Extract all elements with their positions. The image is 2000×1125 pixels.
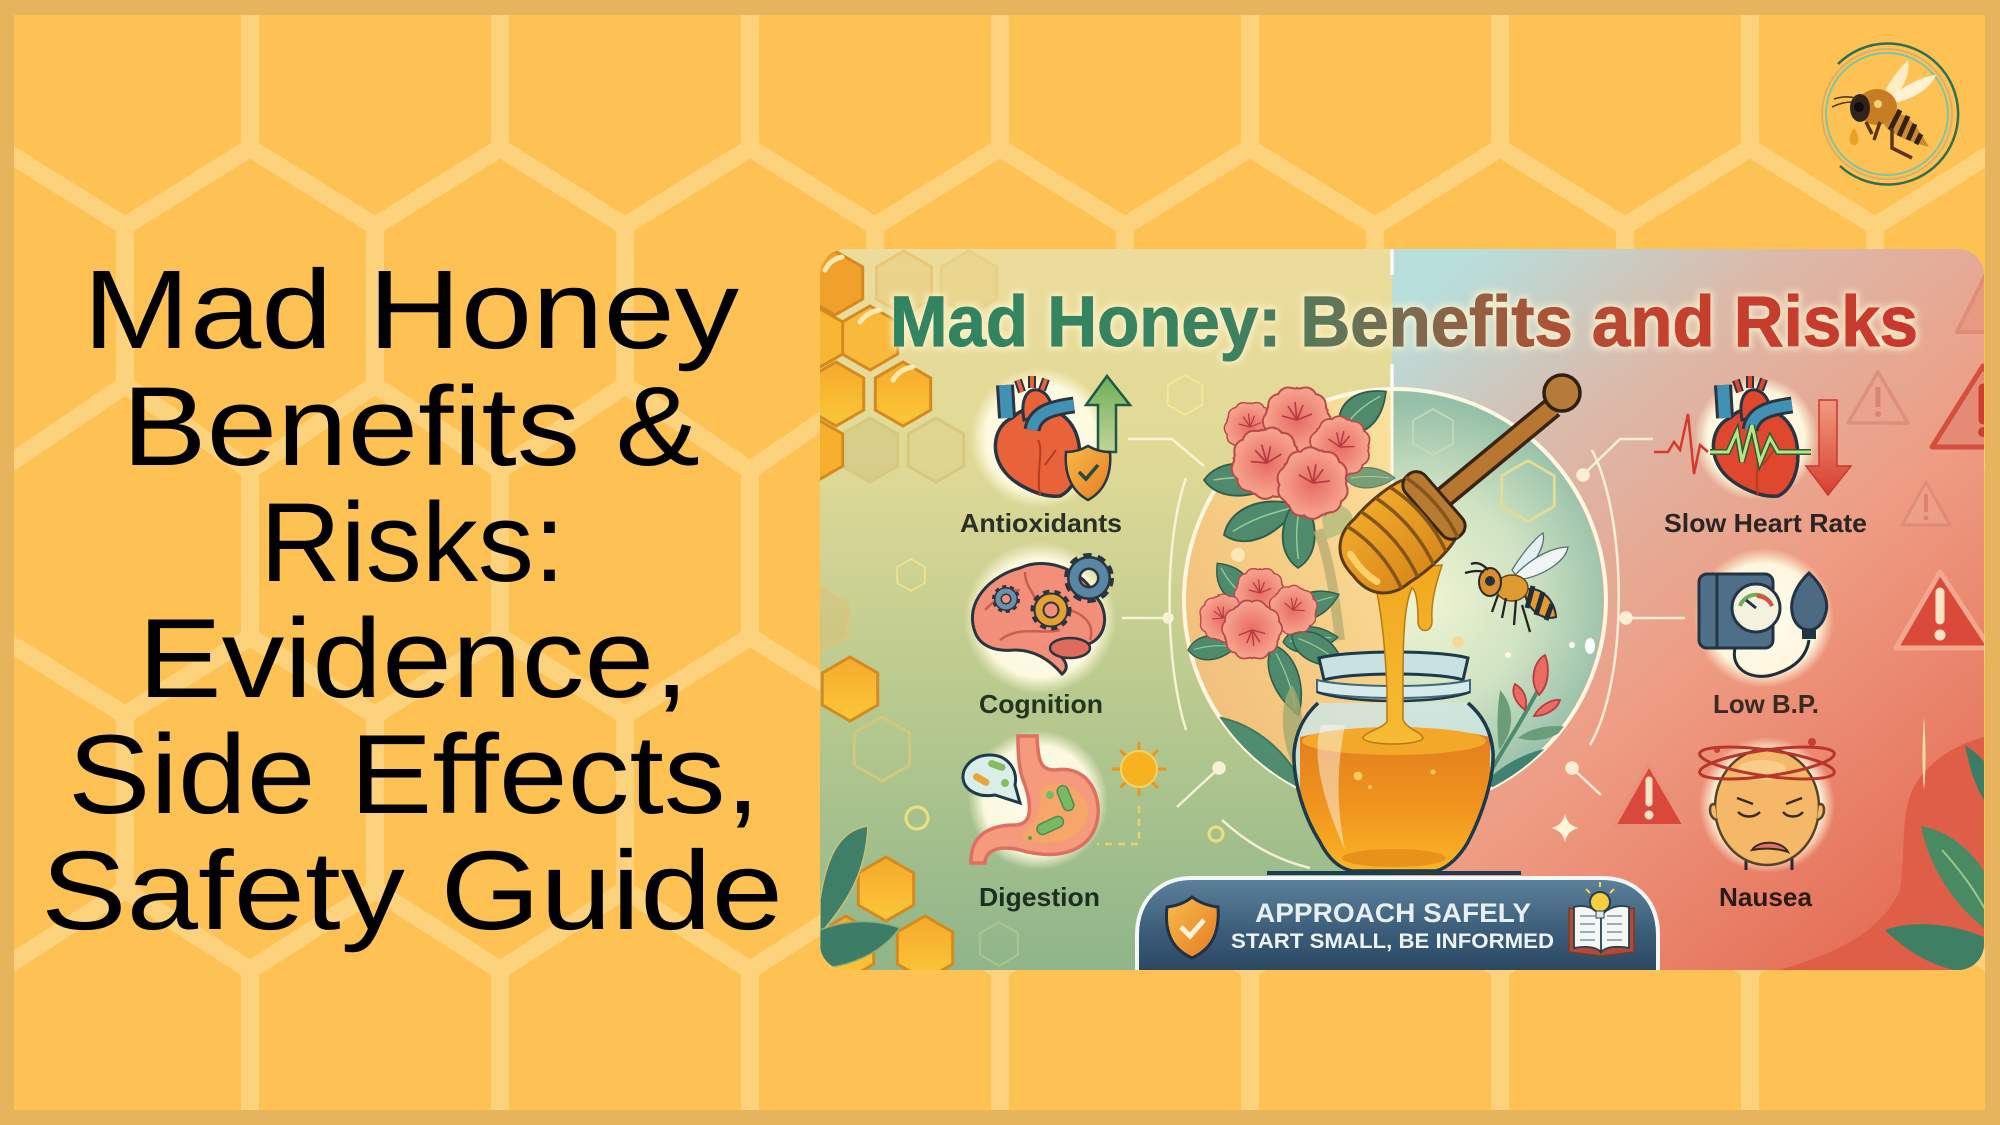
warning triangle, small faint — [1902, 482, 1950, 525]
icon: brain with gears — [964, 542, 1116, 694]
pink bud — [1513, 655, 1560, 716]
main title: Side Effects, — [68, 712, 760, 837]
flowers and leaves, top cluster — [1204, 378, 1397, 640]
icon: stomach with microbes and sun — [963, 730, 1165, 870]
panel background — [820, 249, 1984, 970]
main title — [41, 247, 783, 953]
label: slow heart rate: Slow Heart Rate — [1664, 508, 1867, 538]
icon: open book with light bulb — [1569, 882, 1634, 956]
icon: blood pressure monitor — [1694, 548, 1834, 688]
honeycomb and leaves, bottom left — [818, 826, 953, 980]
honeycomb cluster, top left — [820, 250, 998, 484]
main title: Safety Guide — [41, 828, 783, 953]
warning triangle, red — [1896, 572, 1990, 648]
warning triangle, faint — [1848, 372, 1908, 423]
label: digestion: Digestion — [979, 882, 1100, 912]
warning triangle, top right corner — [1955, 274, 1984, 334]
label: cognition: Cognition — [979, 689, 1103, 719]
decorative arcs and connector lines — [1122, 439, 1685, 868]
main title: Benefits & — [122, 364, 700, 489]
sparkle — [1552, 717, 1926, 842]
icon: heart with shield and up arrow — [970, 368, 1130, 508]
warning triangles — [1614, 262, 2000, 826]
jar of honey — [1267, 652, 1521, 875]
title heading: Mad Honey: Benefits and Risks — [890, 283, 1918, 362]
main title: Evidence, — [138, 596, 689, 721]
main title: Risks: — [260, 480, 565, 605]
central circle — [1181, 389, 1606, 811]
banner: approach safely — [1137, 878, 1658, 972]
panel: mad honey illustration — [787, 249, 2000, 980]
icon: nausea face — [1698, 737, 1836, 873]
banner subheading: START SMALL, BE INFORMED — [1231, 930, 1554, 953]
honey dipper — [1324, 375, 1580, 609]
leaves, bottom right — [1885, 745, 2000, 972]
right sprig with bud — [1490, 690, 1564, 787]
logo: bee badge — [1822, 44, 1958, 185]
icon: shield — [1166, 897, 1218, 958]
large foliage at jar left — [1219, 685, 1302, 788]
honey stream — [1363, 565, 1442, 744]
label: nausea: Nausea — [1719, 882, 1813, 912]
table line — [1267, 871, 1521, 875]
warning triangle, by nausea — [1618, 768, 1682, 824]
label: antioxidants: Antioxidants — [960, 508, 1122, 538]
honeycomb, mid left — [792, 375, 1223, 966]
main title: Mad Honey — [83, 247, 739, 372]
flowers and leaves, lower cluster — [1187, 562, 1340, 788]
label: low blood pressure: Low B.P. — [1713, 689, 1819, 719]
warning triangle, large right — [1930, 364, 1984, 450]
bee — [1465, 533, 1568, 632]
banner heading: APPROACH SAFELY — [1255, 898, 1531, 928]
icon: heart with ECG and down arrow — [1654, 376, 1851, 500]
